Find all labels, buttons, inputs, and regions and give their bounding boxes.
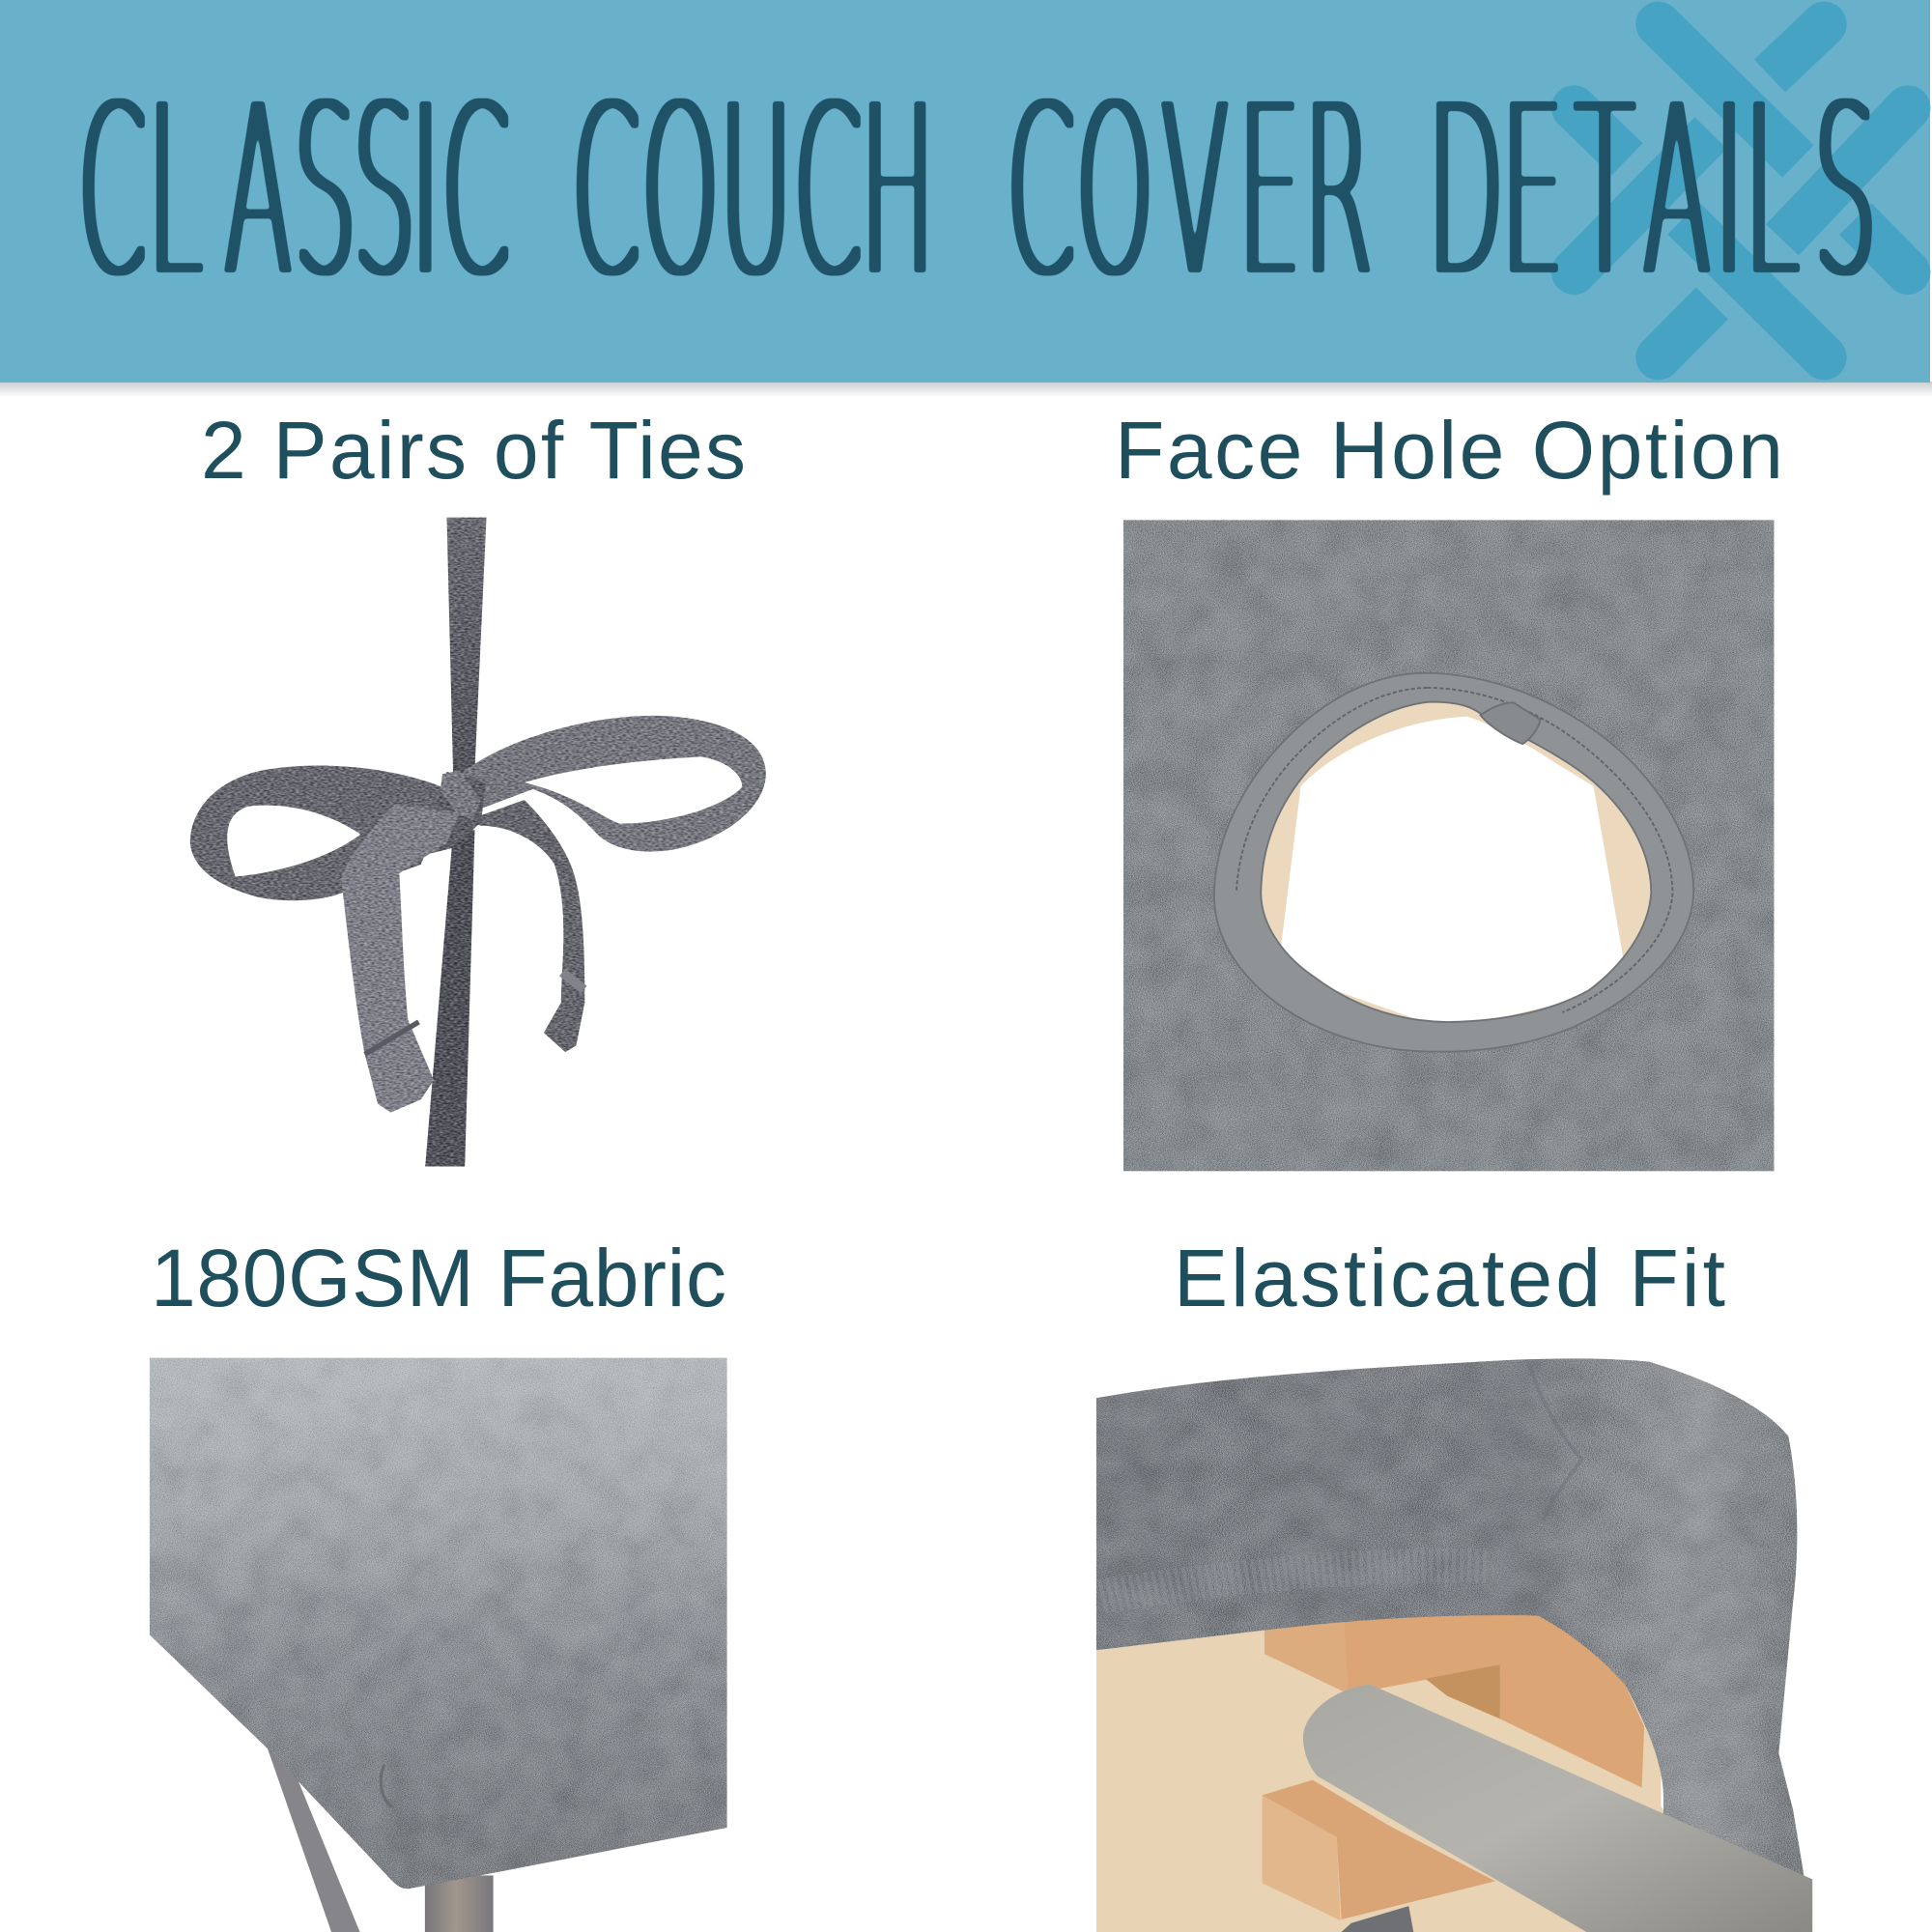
bolt — [1342, 1906, 1413, 1932]
white opening — [1281, 717, 1625, 1030]
panel: elasticated fit photo — [1096, 1358, 1812, 1932]
terry cover — [1096, 1358, 1805, 1883]
terry fabric — [1123, 520, 1774, 1171]
cream table visible through hole — [1214, 673, 1693, 1052]
leg: angled pole — [268, 1747, 360, 1932]
seam fold — [1529, 1364, 1581, 1520]
heading: Elasticated Fit: Elasticated Fit — [1174, 1233, 1725, 1323]
panel: face hole photo — [1123, 520, 1774, 1171]
lower wood block — [1263, 1780, 1495, 1920]
seam — [1481, 702, 1541, 744]
upper wood block — [1264, 1601, 1644, 1788]
heading: 180GSM Fabric: 180GSM Fabric — [151, 1233, 726, 1323]
heading: 2 Pairs of Ties: 2 Pairs of Ties — [201, 405, 746, 496]
stitch line — [1236, 688, 1672, 1012]
icon: woven X logo — [1551, 2, 1930, 380]
panel: bow tie photo — [190, 518, 766, 1166]
bench top — [150, 1358, 727, 1889]
title — [78, 54, 1877, 327]
title: DETAILS — [1428, 54, 1877, 327]
cream table underside — [1096, 1601, 1707, 1932]
title: COUCH — [572, 54, 935, 327]
leg: vertical pole — [425, 1875, 494, 1932]
hole ring — [1214, 673, 1693, 1052]
panel: 180GSM fabric photo — [150, 1358, 727, 1932]
header banner — [0, 0, 1932, 397]
heading: Face Hole Option: Face Hole Option — [1115, 405, 1783, 496]
title: CLASSIC — [78, 54, 510, 327]
title: COVER — [1007, 54, 1373, 327]
elastic rib band — [1101, 1566, 1491, 1597]
metal tube — [1303, 1685, 1812, 1932]
